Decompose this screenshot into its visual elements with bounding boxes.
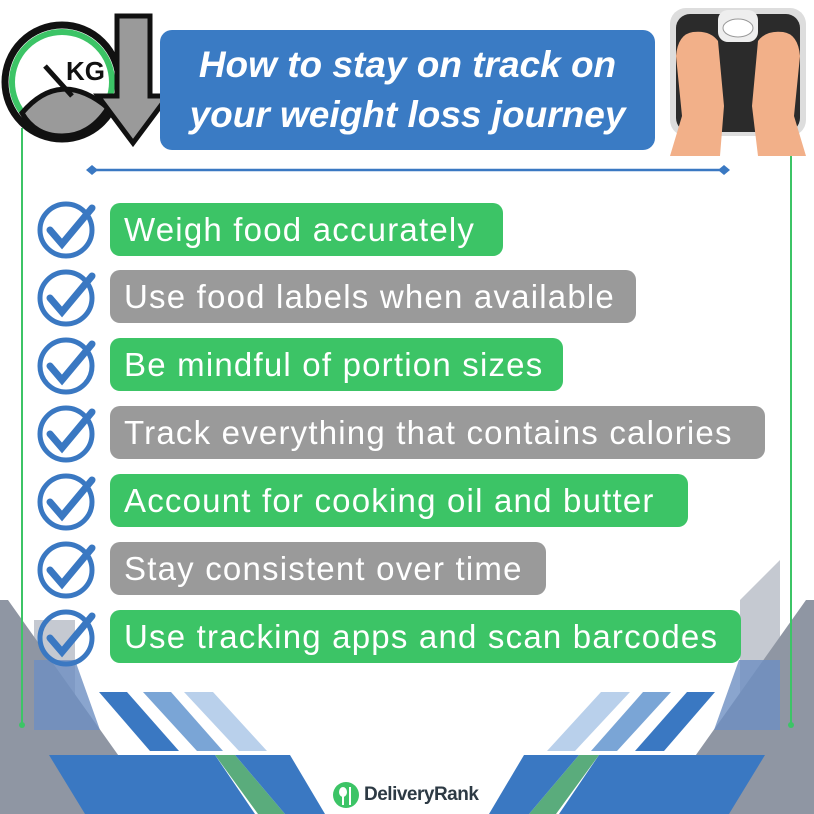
- icon: kg scale with down arrow: [2, 14, 160, 147]
- item 3: [38, 338, 563, 394]
- item 2: [38, 270, 636, 326]
- item 5: [38, 474, 688, 530]
- item 1: [38, 202, 503, 258]
- item 3: Be mindful of portion sizes: [124, 346, 543, 383]
- title box: [160, 30, 655, 150]
- icon: kg scale with down arrow: KG: [66, 56, 105, 86]
- item 7: Use tracking apps and scan barcodes: [124, 618, 718, 655]
- item 1: Weigh food accurately: [124, 211, 475, 248]
- item 4: [38, 406, 765, 462]
- item 4: Track everything that contains calories: [124, 414, 733, 451]
- title box: How to stay on track on: [199, 44, 616, 85]
- icon: feet on scale: [670, 8, 806, 156]
- title box: your weight loss journey: [190, 94, 625, 135]
- item 6: [38, 542, 546, 598]
- item 6: Stay consistent over time: [124, 550, 523, 587]
- logo: DeliveryRank: DeliveryRank: [364, 784, 478, 805]
- item 5: Account for cooking oil and butter: [124, 482, 655, 519]
- checklist: [38, 202, 765, 666]
- logo: DeliveryRank: [333, 782, 479, 808]
- item 2: Use food labels when available: [124, 278, 615, 315]
- item 7: [38, 610, 741, 666]
